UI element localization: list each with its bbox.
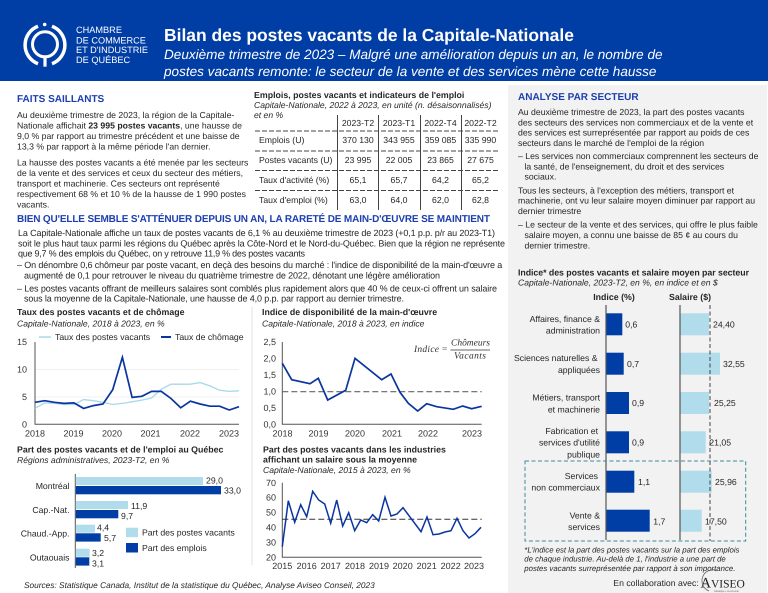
subtitle: Deuxième trimestre de 2023 – Malgré une amélioration depuis un an, le nombre de: [164, 47, 663, 62]
x axis labels: 2022: [180, 429, 200, 439]
value labels: 3,2: [92, 548, 104, 558]
formula: =: [442, 345, 447, 355]
table row labels: Postes vacants (U): [259, 155, 332, 165]
table values: 65,7: [391, 175, 408, 185]
category labels: Métiers, transport: [532, 393, 601, 403]
category labels: administration: [546, 326, 600, 336]
table values: 62,8: [472, 195, 489, 205]
category labels: Montréal: [36, 481, 70, 491]
chart subtitle: Capitale-Nationale, 2018 à 2023, en indice: [262, 319, 425, 329]
table subtitle: et en %: [254, 110, 284, 120]
value labels: 9,7: [121, 511, 133, 521]
text block: faits saillants: vacants.: [17, 199, 49, 209]
heading: analyse par secteur: ANALYSE PAR SECTEUR: [518, 92, 639, 103]
text block: rareté: – On dénombre 0,6 chômeur par poste vacant, en deçà des besoins du marché : l'indice de disponibilité de la main-d'œuvre a: [17, 260, 502, 270]
text block: analyse par secteur: dernier trimestre.: [524, 240, 590, 250]
line: part des postes vacants: [282, 491, 481, 547]
y axis labels: 0,5: [263, 403, 276, 413]
column headers: Salaire ($): [669, 292, 711, 302]
text block: analyse par secteur: machinerie, ont vu leur salaire moyen diminuer par rapport au: [518, 196, 755, 206]
y axis labels: 50: [266, 508, 276, 518]
category labels: Outaouais: [30, 553, 70, 563]
text block: analyse par secteur: dernier trimestre: [518, 206, 581, 216]
text block: faits saillants: de la vente et des services et ceux du secteur des métiers,: [17, 168, 243, 178]
table values: 343 955: [383, 135, 415, 145]
chart title: Taux des postes vacants et de chômage: [17, 307, 185, 317]
value labels: 3,1: [92, 559, 104, 569]
text block: rareté: [17, 228, 505, 304]
panel: right column background: [508, 85, 767, 593]
table values: 65,1: [350, 175, 367, 185]
heading: rareté de main-d'œuvre: BIEN QU'ELLE SEMBLE S'ATTÉNUER DEPUIS UN AN, LA RARETÉ DE MAIN-D'ŒUVRE SE MAINTIENT: [17, 213, 490, 225]
line: indice: [282, 358, 482, 411]
y axis labels: 10: [17, 364, 27, 374]
category labels: Fabrication et: [545, 426, 599, 436]
value labels: indice: 1,1: [638, 477, 650, 487]
chart title: Part des postes vacants dans les industries: [263, 445, 446, 455]
value labels: 11,9: [131, 501, 147, 511]
x axis labels: 2021: [417, 561, 437, 571]
text block: faits saillants: Au deuxième trimestre de 2023, la région de la Capitale-: [17, 110, 234, 120]
line: taux des postes vacants: [35, 383, 239, 408]
x axis labels: 2018: [345, 561, 365, 571]
collaboration credit: [613, 570, 745, 593]
text block: analyse par secteur: la santé, de l'enseignement, du droit et des services: [524, 161, 725, 171]
logo wordmark: CHAMBRE: [76, 25, 122, 35]
table row labels: Taux d'emploi (%): [259, 195, 328, 205]
x axis labels: 2022: [418, 429, 438, 439]
chart subtitle: Capitale-Nationale, 2015 à 2023, en %: [263, 465, 411, 475]
chart subtitle: Régions administratives, 2023-T2, en %: [17, 455, 170, 465]
text block: faits saillants: 9,0 % par rapport au trimestre précédent et une baisse de: [17, 131, 240, 141]
chart title: Indice de disponibilité de la main-d'œuvre: [262, 307, 437, 317]
table values: 23 865: [427, 155, 454, 165]
x axis labels: 2015: [272, 561, 292, 571]
table values: 359 085: [425, 135, 456, 145]
category labels: Cap.-Nat.: [32, 505, 70, 515]
y axis labels: 20: [266, 552, 276, 562]
value labels: salaire: 21,05: [709, 438, 731, 448]
chart: indice de disponibilité de la main-d'œuvre: [262, 307, 490, 439]
text block: rareté: augmenté de 0,1 pour retrouver le niveau du quatrième trimestre de 2022, dénotant une légère amélioration: [24, 271, 440, 281]
chart title: Part des postes vacants et de l'emploi au Québec: [17, 445, 224, 455]
category labels: non commerciaux: [531, 483, 601, 493]
text block: faits saillants: 13,3 % par rapport à la même période l'an dernier.: [17, 141, 210, 151]
footnote: *L'indice est la part des postes vacants sur la part des emplois: [524, 545, 740, 554]
text block: analyse par secteur: des services est surreprésentée par rapport au poids de ces: [518, 127, 750, 137]
x axis labels: 2019: [308, 429, 329, 439]
y axis labels: 0,0: [263, 419, 276, 429]
column headers: Indice (%): [593, 292, 635, 302]
table: emplois, postes vacants et indicateurs: [254, 90, 500, 210]
y axis labels: 1,5: [263, 370, 276, 380]
chart title: Indice* des postes vacants et salaire moyen par secteur: [518, 268, 750, 278]
chart: taux des postes vacants et de chômage: [17, 307, 244, 439]
y axis labels: 40: [266, 522, 276, 532]
value labels: salaire: 25,25: [714, 398, 736, 408]
chart subtitle: Capitale-Nationale, 2023-T2, en %, en indice et en $: [518, 278, 718, 288]
logo wordmark: DE COMMERCE: [76, 35, 146, 45]
y axis labels: 0: [22, 419, 27, 429]
category labels: Services: [565, 471, 599, 481]
category labels: services d'utilité: [539, 438, 600, 448]
text block: analyse par secteur: – Le secteur de la vente et des services, qui offre le plus faible: [518, 220, 758, 230]
category labels: Vente &: [570, 510, 600, 520]
table subtitle: Capitale-Nationale, 2022 à 2023, en unité (n. désaisonnalisés): [254, 100, 492, 110]
table row labels: Emplois (U): [259, 135, 304, 145]
table header row: 2022-T4: [424, 118, 457, 128]
category labels: services: [568, 522, 601, 532]
category labels: Affaires, finance &: [530, 314, 600, 324]
category labels: et machinerie: [548, 404, 600, 414]
text block: analyse par secteur: secteurs dans le marché de l'emploi de la région: [518, 138, 704, 148]
value labels: indice: 0,7: [627, 359, 639, 369]
title: Bilan des postes vacants de la Capitale-Nationale: [164, 25, 574, 45]
value labels: salaire: 17,50: [705, 516, 727, 526]
bars: salaire: [680, 313, 720, 532]
table values: 64,0: [391, 195, 408, 205]
x axis labels: 2021: [140, 429, 161, 439]
formula: [413, 338, 490, 362]
logo wordmark: DE QUÉBEC: [76, 55, 130, 65]
x axis labels: 2020: [102, 429, 122, 439]
legend: Taux des postes vacants: [55, 332, 151, 342]
table header row: 2023-T2: [342, 118, 374, 128]
chart: indice et salaire moyen par secteur: [514, 268, 750, 541]
formula: Indice: [413, 345, 439, 355]
text block: rareté: – Les postes vacants offrant de meilleurs salaires sont comblés plus rapidement alors que 40 % de ceux-ci offrent un salaire: [17, 284, 497, 294]
table values: 63,0: [350, 195, 367, 205]
text block: faits saillants: La hausse des postes vacants a été menée par les secteurs: [17, 158, 249, 168]
table values: 370 130: [342, 135, 374, 145]
value labels: indice: 0,6: [625, 320, 638, 330]
bars: part des emplois: [76, 486, 221, 566]
table values: 335 990: [465, 135, 496, 145]
x axis labels: 2023: [462, 429, 482, 439]
formula: Vacants: [454, 352, 486, 362]
logo wordmark: ET D'INDUSTRIE: [76, 45, 148, 55]
x axis labels: 2020: [345, 429, 365, 439]
value labels: salaire: 32,55: [723, 359, 745, 369]
x axis labels: 2023: [464, 561, 484, 571]
text block: analyse par secteur: Tous les secteurs, à l'exception des métiers, transport et: [518, 185, 735, 195]
category labels: appliquées: [558, 365, 601, 375]
value labels: indice: 0,9: [632, 398, 644, 408]
value labels: indice: 0,9: [632, 438, 644, 448]
x axis labels: 2017: [321, 561, 341, 571]
subtitle: postes vacants remonte: le secteur de la vente et des services mène cette hausse: [163, 64, 657, 79]
icon: chamber logo: [25, 23, 65, 67]
x axis labels: 2019: [369, 561, 389, 571]
icon: aviseo logo: Stratégie + Économie: [714, 589, 739, 593]
chart: part des postes vacants, industries sous la moyenne: [263, 445, 484, 571]
table header row: 2022-T2: [464, 118, 497, 128]
category labels: Chaud.-App.: [21, 529, 70, 539]
y axis labels: 2,0: [263, 354, 276, 364]
reference line at 1.0: [282, 391, 482, 393]
footnote: de chaque industrie. Au-delà de 1, l'industrie a une part de: [524, 555, 726, 564]
table values: 23 995: [345, 155, 371, 165]
heading: faits saillants: FAITS SAILLANTS: [17, 94, 105, 105]
value labels: salaire: 24,40: [713, 320, 735, 330]
table values: 65,2: [472, 175, 489, 185]
text block: rareté: soit le plus haut taux parmi les régions du Québec après la Côte-Nord et le Nord-du-Québec. Bien que la région ne représente: [18, 238, 505, 248]
icon: aviseo logo: AVISEO: [700, 576, 745, 592]
collaboration credit: En collaboration avec:: [613, 578, 699, 588]
text block: rareté: que 9,7 % des emplois du Québec, on y retrouve 11,9 % des postes vacants: [18, 249, 306, 259]
y axis labels: 5: [22, 392, 27, 402]
bars: part des postes vacants: [76, 477, 203, 557]
value labels: 4,4: [97, 523, 109, 533]
text block: analyse par secteur: des secteurs des services non commerciaux et de la vente et: [518, 117, 754, 127]
legend: Taux de chômage: [175, 332, 244, 342]
legend: [126, 528, 235, 553]
y axis labels: 70: [266, 478, 276, 488]
table values: 27 675: [467, 155, 494, 165]
chart title: affichant un salaire sous la moyenne: [263, 455, 417, 465]
highlight box: [525, 461, 746, 541]
value labels: 29,0: [206, 476, 223, 486]
legend: Part des emplois: [142, 543, 207, 553]
text block: faits saillants: transport et machinerie. Ces secteurs ont représenté: [17, 178, 220, 188]
text block: faits saillants: respectivement 68 % et 10 % de la hausse de 1 990 postes: [17, 189, 247, 199]
table title: Emplois, postes vacants et indicateurs de l'emploi: [254, 90, 464, 100]
bars: indice: [606, 313, 650, 532]
y axis labels: 30: [266, 537, 276, 547]
chart: part des postes vacants et de l'emploi au Québec: [17, 445, 241, 569]
value labels: salaire: 25,96: [715, 477, 737, 487]
text block: faits saillants: Nationale affichait 23 995 postes vacants, une hausse de: [17, 120, 242, 130]
y axis labels: 1,0: [263, 386, 276, 396]
value labels: indice: 1,7: [653, 516, 666, 526]
average reference line: [282, 518, 482, 520]
table row labels: Taux d'activité (%): [259, 175, 329, 185]
panel: header band: [0, 0, 768, 81]
text block: rareté: sous la moyenne de la Capitale-Nationale, une hausse de 4,0 p.p. par rapport au dernier trimestre.: [24, 294, 404, 304]
table values: 64,2: [432, 175, 449, 185]
text block: analyse par secteur: – Les services non commerciaux comprennent les secteurs de: [518, 151, 759, 161]
text block: analyse par secteur: salaire moyen, a connu une baisse de 85 ¢ au cours du: [524, 230, 738, 240]
legend: [39, 332, 244, 342]
y axis labels: 15: [17, 337, 27, 347]
y axis labels: 2,5: [263, 337, 276, 347]
formula: Chômeurs: [451, 338, 490, 348]
table header row: 2023-T1: [383, 118, 415, 128]
value labels: 33,0: [224, 486, 241, 496]
x axis labels: 2019: [63, 429, 84, 439]
x axis labels: 2023: [219, 429, 239, 439]
x axis labels: 2016: [297, 561, 317, 571]
chart subtitle: Capitale-Nationale, 2018 à 2023, en %: [17, 319, 165, 329]
sources note: Sources: Statistique Canada, Institut de la statistique du Québec, Analyse Aviseo Conseil, 2023: [24, 580, 375, 590]
table values: 22 005: [386, 155, 412, 165]
table values: 62,0: [432, 195, 449, 205]
legend: Part des postes vacants: [142, 528, 235, 538]
x axis labels: 2022: [441, 561, 461, 571]
category labels: Sciences naturelles &: [514, 353, 598, 363]
footnote: postes vacants surreprésentée par rapport à son importance.: [523, 564, 735, 573]
icon: aviseo logo: [700, 570, 745, 593]
x axis labels: 2018: [25, 429, 45, 439]
x axis labels: 2020: [393, 561, 413, 571]
text block: analyse par secteur: sociaux.: [524, 171, 556, 181]
line: taux de chômage: [35, 357, 239, 410]
value labels: 5,7: [104, 533, 116, 543]
category labels: publique: [567, 449, 600, 459]
x axis labels: 2021: [382, 429, 402, 439]
text block: analyse par secteur: Au deuxième trimestre de 2023, la part des postes vacants: [518, 107, 745, 117]
y axis labels: 60: [266, 493, 276, 503]
text block: rareté: La Capitale-Nationale affiche un taux de postes vacants de 6,1 % au deuxième trimestre de 2023 (+0,1 p.p. p/r au 2023-T1): [18, 228, 495, 238]
x axis labels: 2018: [272, 429, 293, 439]
